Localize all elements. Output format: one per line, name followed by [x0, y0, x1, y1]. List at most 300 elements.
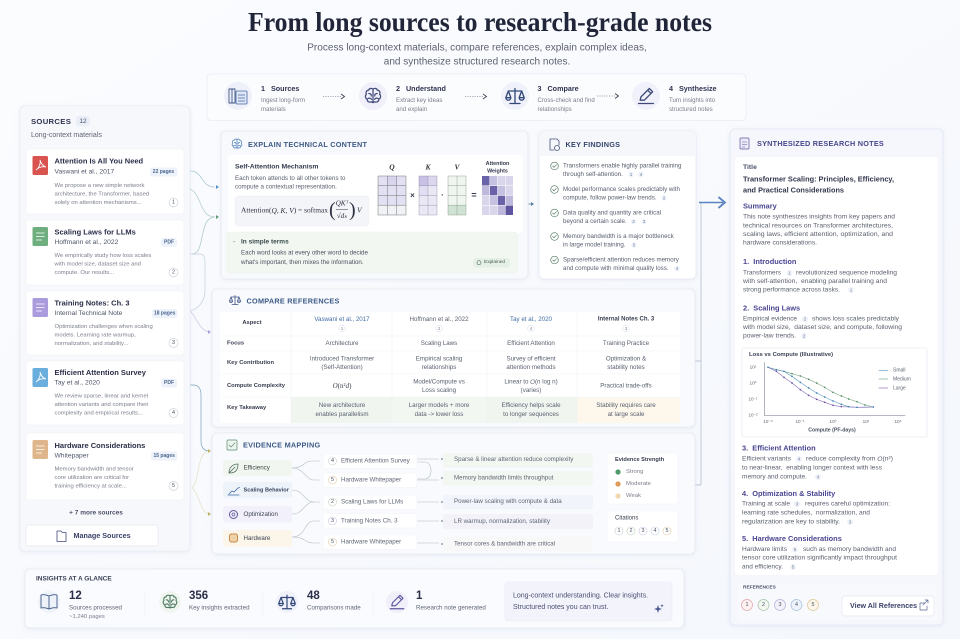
legend: citations: 2: [630, 528, 632, 534]
note section 5: Hardware limits: [742, 546, 787, 553]
chart: loss vs compute: [742, 348, 927, 437]
chart: loss vs compute: 10⁰: [830, 419, 837, 424]
category: scaling behavior: [223, 482, 292, 498]
matrix V: [448, 162, 466, 215]
source: hardware whitepaper: [323, 473, 417, 488]
note section 2: Empirical evidence: [743, 316, 797, 322]
source card 4: attention variants and compare their: [54, 402, 149, 408]
stat: sources processed: ~1,240 pages: [69, 614, 105, 620]
finding 5: 4: [676, 266, 679, 271]
comparison table: 3: [625, 326, 628, 331]
stat: key insights: [159, 590, 250, 613]
finding 4: Memory bandwidth is a major bottleneck: [563, 233, 675, 240]
comparison table: [220, 312, 680, 423]
comparison table: Scaling Laws: [421, 340, 457, 347]
note title: Transformer Scaling: Principles, Efficiency,: [743, 174, 894, 184]
formula: (: [329, 199, 336, 221]
source card 1: 1: [172, 200, 175, 206]
source: hardware whitepaper: 5: [331, 477, 334, 483]
step 3: compare: Cross-check and find: [538, 97, 595, 104]
panel: sources: [20, 106, 190, 551]
chart: loss vs compute: 10⁰: [750, 380, 757, 386]
subtitle: and synthesize structured research notes.: [384, 56, 570, 68]
more sources: + 7 more sources: [69, 510, 123, 516]
sources heading: SOURCES: [31, 117, 71, 126]
references row: 5: [812, 602, 814, 608]
legend: evidence strength: Weak: [626, 493, 641, 499]
finding 3: [551, 209, 661, 225]
finding 3: Data quality and quantity are critical: [563, 210, 661, 216]
view all references button: [842, 596, 934, 616]
source card 5: training efficiency at scale...: [54, 484, 127, 490]
legend: evidence strength: Strong: [626, 469, 643, 475]
formula: Attention(Q, K, V) = softmax: [241, 206, 328, 214]
legend: evidence strength: Moderate: [626, 481, 652, 487]
sources heading: [31, 116, 102, 139]
comparison table: 4: [530, 326, 533, 331]
chart: loss vs compute: Compute (PF-days): [808, 428, 856, 434]
notes heading: SYNTHESIZED RESEARCH NOTES: [757, 139, 884, 148]
category: hardware: [223, 530, 292, 547]
in simple terms callout: In simple terms: [241, 238, 289, 246]
source card 3: [26, 291, 184, 355]
self-attention text: Each token attends to all other tokens to: [235, 175, 346, 182]
formula: √dₖ: [337, 212, 348, 220]
note section 1: 1: [850, 288, 853, 292]
comparison table: Training Practice: [603, 340, 650, 347]
icon: tan doc: [32, 440, 48, 459]
note summary: scaling laws, efficient attention, optimization, and: [743, 231, 893, 238]
formula: ): [349, 199, 356, 221]
step 4: synthesize: structured notes: [669, 106, 713, 113]
note section 3: to near-linear, enabling longer context with less: [742, 464, 882, 472]
icon: green doc: [32, 227, 48, 246]
note section 2: with model size, dataset size, and compute, following: [742, 324, 902, 331]
note section 2: 2: [803, 334, 806, 338]
comparison table: Hoffmann et al., 2022: [409, 316, 469, 323]
comparison table: (varies): [521, 387, 541, 394]
note section 2: 2. Scaling Laws: [743, 304, 800, 312]
references row: [738, 583, 938, 620]
comparison table: 2: [438, 326, 441, 331]
finding 4: [551, 233, 675, 248]
source: scaling laws for LLMs: [323, 495, 417, 510]
step 1: sources: materials: [261, 106, 286, 113]
finding 2: Model performance scales predictably with: [563, 186, 680, 193]
chart: loss vs compute: 10¹: [750, 364, 757, 370]
stat: comparisons: 48: [307, 590, 320, 602]
evidence connectors: [292, 458, 443, 545]
source card 3: models. Learning rate warmup,: [54, 332, 136, 338]
source card 1: architecture, the Transformer, based: [54, 192, 149, 198]
manage sources button: [26, 525, 158, 546]
chart: loss vs compute: 10⁻¹: [748, 396, 758, 402]
note section 1: with self-attention, enabling parallel training and: [742, 278, 887, 285]
in simple terms callout: what's important, then mixes the information.: [240, 259, 364, 266]
matrix Q: Q: [389, 162, 395, 172]
category: hardware: Hardware: [244, 535, 271, 542]
findings heading: [550, 139, 620, 150]
in simple terms callout: [227, 232, 517, 273]
comparison table: Empirical scaling: [416, 356, 463, 362]
sources heading: 12: [79, 118, 87, 125]
title: From long sources to research-grade notes: [248, 7, 712, 37]
formula: [235, 196, 369, 226]
comparison table: Optimization &: [606, 356, 647, 362]
category: optimization: Optimization: [244, 511, 278, 518]
comparison table: at large scale: [608, 411, 645, 418]
note section 5: tensor core utilization significantly impact throughput: [742, 554, 897, 562]
finding 1: 1: [630, 172, 633, 177]
note section 1: 1. Introduction: [743, 257, 797, 266]
source card 3: Optimization challenges when scaling: [54, 324, 153, 330]
formula: QKᵀ: [336, 200, 349, 208]
source card 5: Hardware Considerations: [54, 441, 145, 450]
note section 5: and efficiency.: [742, 564, 783, 570]
comparison table: Aspect: [242, 320, 262, 326]
note section 3: Efficient variants: [742, 456, 791, 462]
step 2: understand: [359, 82, 446, 113]
source card 1: 22 pages: [153, 169, 174, 175]
step 1: sources: 1 Sources: [261, 84, 299, 93]
arrow: modules to synthesized notes: [690, 198, 725, 485]
note section 2: 2: [804, 316, 807, 322]
comparison table: Stability requires care: [596, 402, 656, 409]
view all references button: View All References: [850, 602, 917, 610]
comparison table: Practical trade-offs: [600, 382, 652, 390]
stat: sources processed: Sources processed: [69, 604, 123, 612]
note section 5: 5. Hardware Considerations: [742, 534, 842, 543]
finding: LR warmup: [443, 514, 593, 529]
comparison table: Key Contribution: [227, 360, 274, 366]
note title: Title: [743, 164, 757, 171]
comparison table: Tay et al., 2020: [510, 316, 553, 323]
finding: LR warmup: LR warmup, normalization, stability: [454, 518, 551, 525]
comparison table: to longer sequences: [503, 411, 559, 418]
operator: equals: =: [471, 190, 477, 200]
source card 2: compute. Our results...: [54, 270, 114, 276]
category: efficiency: [223, 460, 292, 476]
source card 3: Internal Technical Note: [54, 310, 123, 317]
chart: loss vs compute: 10⁻²: [748, 412, 758, 418]
note summary: Summary: [743, 202, 778, 210]
note title: [743, 164, 894, 194]
matrix attention weights: Attention: [486, 161, 509, 167]
evidence heading: EVIDENCE MAPPING: [243, 440, 320, 450]
panel: synthesized research notes: [730, 129, 943, 625]
panel: insights at a glance: [25, 569, 684, 628]
note section 1: [742, 257, 897, 294]
legend: citations: [607, 511, 678, 542]
comparison table: (Self-Attention): [321, 364, 363, 371]
chart: loss vs compute: 10⁶: [894, 419, 902, 424]
source card 2: Hoffmann et al., 2022: [54, 239, 119, 246]
arrow: [323, 94, 344, 99]
source card 5: core utilization are critical for: [54, 475, 129, 481]
comparison table: Loss scaling: [422, 387, 457, 394]
note section 4: [742, 489, 890, 526]
finding 3: 3: [643, 219, 646, 224]
step 2: understand: 2 Understand: [396, 84, 446, 93]
panel: explain technical content: [221, 131, 528, 279]
note section 2: shows loss scales predictably: [812, 316, 900, 322]
source card 3: Training Notes: Ch. 3: [54, 298, 130, 308]
note section 4: 3: [796, 502, 799, 506]
source card 4: [26, 361, 184, 425]
chart: loss vs compute: 10⁻⁶: [763, 419, 773, 424]
stat: comparisons: [276, 590, 361, 613]
finding: power-law scaling: Power-law scaling with compute & data: [454, 498, 562, 505]
note section 4: 3: [849, 520, 852, 524]
source: hardware whitepaper 2: Hardware Whitepaper: [341, 538, 401, 546]
source card 1: Vaswani et al., 2017: [54, 168, 115, 176]
matrix V: V: [454, 162, 460, 172]
stat: comparisons: Comparisons made: [307, 604, 361, 612]
step 2: understand: Extract key ideas: [396, 97, 442, 104]
chart: loss vs compute: Loss vs Compute (Illustrative): [749, 352, 833, 358]
step 1: sources: [224, 82, 305, 113]
finding 4: in large model training.: [563, 242, 626, 248]
comparison table: stability notes: [607, 364, 645, 371]
source card 3: normalization, and stability...: [54, 341, 129, 347]
source card 1: [26, 149, 184, 214]
stat: key insights: Key insights extracted: [189, 604, 250, 612]
note section 3: 3. Efficient Attention: [742, 444, 816, 452]
comparison table: O(n²d): [333, 382, 352, 390]
source: efficient attention survey: 4: [331, 458, 334, 464]
stat: research note: 1: [416, 590, 423, 602]
legend: citations: 4: [654, 528, 656, 534]
matrix attention weights: [482, 161, 513, 215]
comparison table: Introduced Transformer: [310, 356, 374, 362]
callout: trust statement: [505, 582, 672, 621]
note section 3: reduce complexity from O(n²): [806, 456, 893, 462]
source card 2: Scaling Laws for LLMs: [54, 228, 136, 236]
matrix Q: [378, 162, 406, 215]
source card 3: 18 pages: [154, 310, 176, 316]
source card 1: solely on attention mechanisms...: [54, 200, 142, 206]
source card 5: 5: [172, 483, 175, 489]
in simple terms callout: Explained: [484, 259, 505, 265]
self-attention text: [235, 164, 346, 190]
finding 1: 4: [640, 172, 643, 177]
finding 1: through self-attention.: [563, 171, 623, 178]
subtitle: Process long-context materials, compare references, explain complex ideas,: [307, 42, 647, 54]
references row: 2: [762, 602, 765, 608]
stat: research note: [386, 590, 486, 613]
matrix K: [419, 162, 437, 215]
source card 4: 4: [172, 410, 175, 416]
operator: times: ×: [410, 191, 415, 200]
category: efficiency: Efficiency: [244, 464, 271, 472]
chart: loss vs compute: 10¹: [863, 419, 870, 424]
source card 5: 15 pages: [153, 453, 175, 459]
finding 5: [551, 256, 680, 272]
source card 1: We propose a new simple network: [54, 183, 144, 189]
note section 3: 4: [798, 456, 801, 462]
step 3: compare: [501, 82, 595, 113]
step 4: synthesize: [632, 82, 717, 113]
note summary: technical resources on Transformer architectures,: [743, 222, 893, 230]
source card 2: We empirically study how loss scales: [54, 253, 151, 259]
stat: key insights: 356: [189, 590, 208, 602]
comparison table: relationships: [422, 364, 456, 371]
connectors: sources to modules: [184, 171, 219, 516]
note section 2: [742, 304, 902, 340]
subtitle: [307, 42, 647, 68]
chart: loss vs compute: 10⁻¹: [795, 419, 805, 424]
source card 4: Tay et al., 2020: [54, 380, 100, 386]
source: scaling laws for LLMs: 2: [331, 499, 334, 505]
step 4: synthesize: 4 Synthesize: [669, 84, 717, 93]
comparison table: Efficiency helps scale: [501, 402, 561, 409]
finding: power-law scaling: [443, 495, 593, 509]
formula: V: [357, 206, 363, 214]
self-attention text: Self-Attention Mechanism: [235, 164, 318, 170]
comparison table: Larger models + more: [409, 402, 470, 409]
note section 3: memory and compute.: [742, 474, 807, 480]
source card 5: [26, 433, 184, 500]
note section 5: 5: [794, 547, 797, 552]
finding 3: beyond a certain scale.: [563, 218, 627, 225]
note section 5: 5: [792, 564, 795, 570]
source card 2: with model size, dataset size and: [54, 262, 141, 268]
icon: purple doc: [32, 298, 48, 317]
references row: 4: [795, 602, 798, 608]
note title: and Practical Considerations: [743, 186, 844, 194]
manage sources button: Manage Sources: [74, 531, 131, 540]
source card 2: 2: [172, 270, 175, 276]
finding 2: [551, 186, 680, 202]
chart: loss vs compute: Medium: [893, 376, 911, 382]
note section 5: such as memory bandwidth and: [803, 546, 896, 553]
step 3: compare: 3 Compare: [538, 84, 579, 93]
source: training notes: [323, 514, 417, 528]
source card 4: We review sparse, linear and kernel: [54, 394, 148, 400]
panel: evidence mapping: [212, 433, 695, 554]
note summary: hardware considerations.: [743, 240, 817, 246]
self-attention text: compute a contextual representation.: [235, 184, 337, 190]
comparison table: Model/Compute vs: [413, 378, 465, 386]
panel: insights at a glance: INSIGHTS AT A GLANCE: [36, 576, 112, 582]
source card 4: Efficient Attention Survey: [54, 368, 147, 377]
comparison table: Focus: [227, 340, 244, 346]
note section 1: Transformers: [743, 270, 781, 276]
finding 4: 5: [633, 242, 636, 248]
source: training notes: 3: [331, 518, 334, 524]
source card 5: Memory bandwidth and tensor: [54, 466, 134, 472]
note section 2: power-law trends.: [743, 332, 796, 340]
finding 1: Transformers enable highly parallel training: [563, 162, 682, 170]
comparison table: enables parallelism: [316, 411, 368, 418]
category: scaling behavior: Scaling Behavior: [244, 488, 290, 494]
finding 2: 2: [663, 196, 666, 200]
finding: sparse and linear attention: [443, 453, 593, 468]
legend: citations: 1: [618, 528, 620, 534]
comparison table: Key Takeaway: [227, 405, 267, 411]
chart: loss vs compute: Small: [893, 368, 906, 374]
source: efficient attention survey: [323, 454, 417, 468]
comparison table: attention methods: [506, 364, 556, 371]
step 4: synthesize: Turn insights into: [669, 97, 716, 104]
source: training notes: Training Notes Ch. 3: [341, 518, 398, 524]
step 2: understand: and explain: [396, 106, 427, 113]
arrow: explain to findings: [528, 202, 534, 206]
source card 5: Whitepaper: [54, 452, 89, 460]
step 3: compare: relationships: [538, 106, 572, 113]
matrix attention weights: Weights: [487, 168, 508, 174]
note section 3: 4: [817, 474, 820, 480]
note section 3: [742, 444, 893, 480]
step 1: sources: Ingest long-form: [261, 97, 305, 104]
finding 5: and compute with minimal quality loss.: [563, 265, 669, 272]
findings heading: KEY FINDINGS: [566, 140, 620, 149]
legend: evidence strength: [607, 453, 678, 504]
finding 3: 2: [632, 219, 635, 224]
note section 4: requires careful optimization:: [805, 500, 890, 508]
icon: blue pdf: [32, 368, 48, 387]
comparison table: 1: [341, 326, 344, 331]
panel: key findings: [539, 131, 696, 279]
sources heading: Long-context materials: [31, 132, 102, 139]
comparison table: Architecture: [325, 340, 359, 347]
source: efficient attention survey: Efficient Attention Survey: [341, 458, 411, 464]
finding 5: Sparse/efficient attention reduces memory: [563, 256, 680, 264]
source card 1: Attention Is All You Need: [54, 156, 144, 166]
arrow: [597, 94, 618, 98]
operator: dot: ·: [441, 190, 444, 200]
comparison table: Internal Notes Ch. 3: [598, 316, 655, 322]
comparison table: Efficient Attention: [507, 340, 555, 347]
note summary: [743, 202, 895, 246]
comparison table: Linear to O(n log n): [504, 378, 558, 386]
comparison table: Survey of efficient: [506, 356, 556, 362]
finding 1: [551, 162, 682, 178]
note section 1: strong performance across tasks.: [743, 286, 840, 294]
source: hardware whitepaper: Hardware Whitepaper: [341, 476, 401, 484]
notes heading: [740, 138, 884, 149]
note section 4: learning rate schedules, normalization, and: [742, 510, 870, 516]
comparison table: data -> lower loss: [415, 411, 463, 418]
references row: 3: [778, 602, 782, 608]
source: scaling laws for LLMs: Scaling Laws for LLMs: [341, 498, 403, 506]
in simple terms callout: -: [233, 238, 235, 246]
explain heading: EXPLAIN TECHNICAL CONTENT: [248, 140, 368, 149]
legend: evidence strength: Evidence Strength: [615, 457, 665, 463]
category: optimization: [223, 506, 292, 522]
comparison table: Compute Complexity: [227, 383, 286, 389]
finding: tensor cores: [443, 537, 593, 551]
callout: trust statement: Structured notes you can trust.: [513, 604, 608, 611]
source card 4: PDF: [164, 380, 174, 386]
chart: loss vs compute: Large: [893, 386, 906, 392]
stat: sources processed: 12: [69, 590, 82, 602]
references row: 1: [746, 602, 748, 608]
source card 3: 3: [172, 340, 175, 346]
stat: research note: Research note generated: [416, 604, 486, 612]
note summary: This note synthesizes insights from key papers and: [743, 214, 895, 220]
note section 4: 4. Optimization & Stability: [742, 489, 836, 498]
stat: sources processed: [38, 590, 123, 620]
legend: citations: Citations: [615, 516, 638, 522]
note section 1: 1: [788, 270, 791, 276]
references row: REFERENCES: [743, 584, 777, 590]
process steps bar: [207, 74, 746, 120]
source card 2: [26, 220, 184, 285]
note section 1: revolutionized sequence modeling: [796, 270, 897, 276]
finding: tensor cores: Tensor cores & bandwidth are critical: [454, 540, 555, 548]
source card 4: complexity and empirical results...: [54, 410, 143, 416]
